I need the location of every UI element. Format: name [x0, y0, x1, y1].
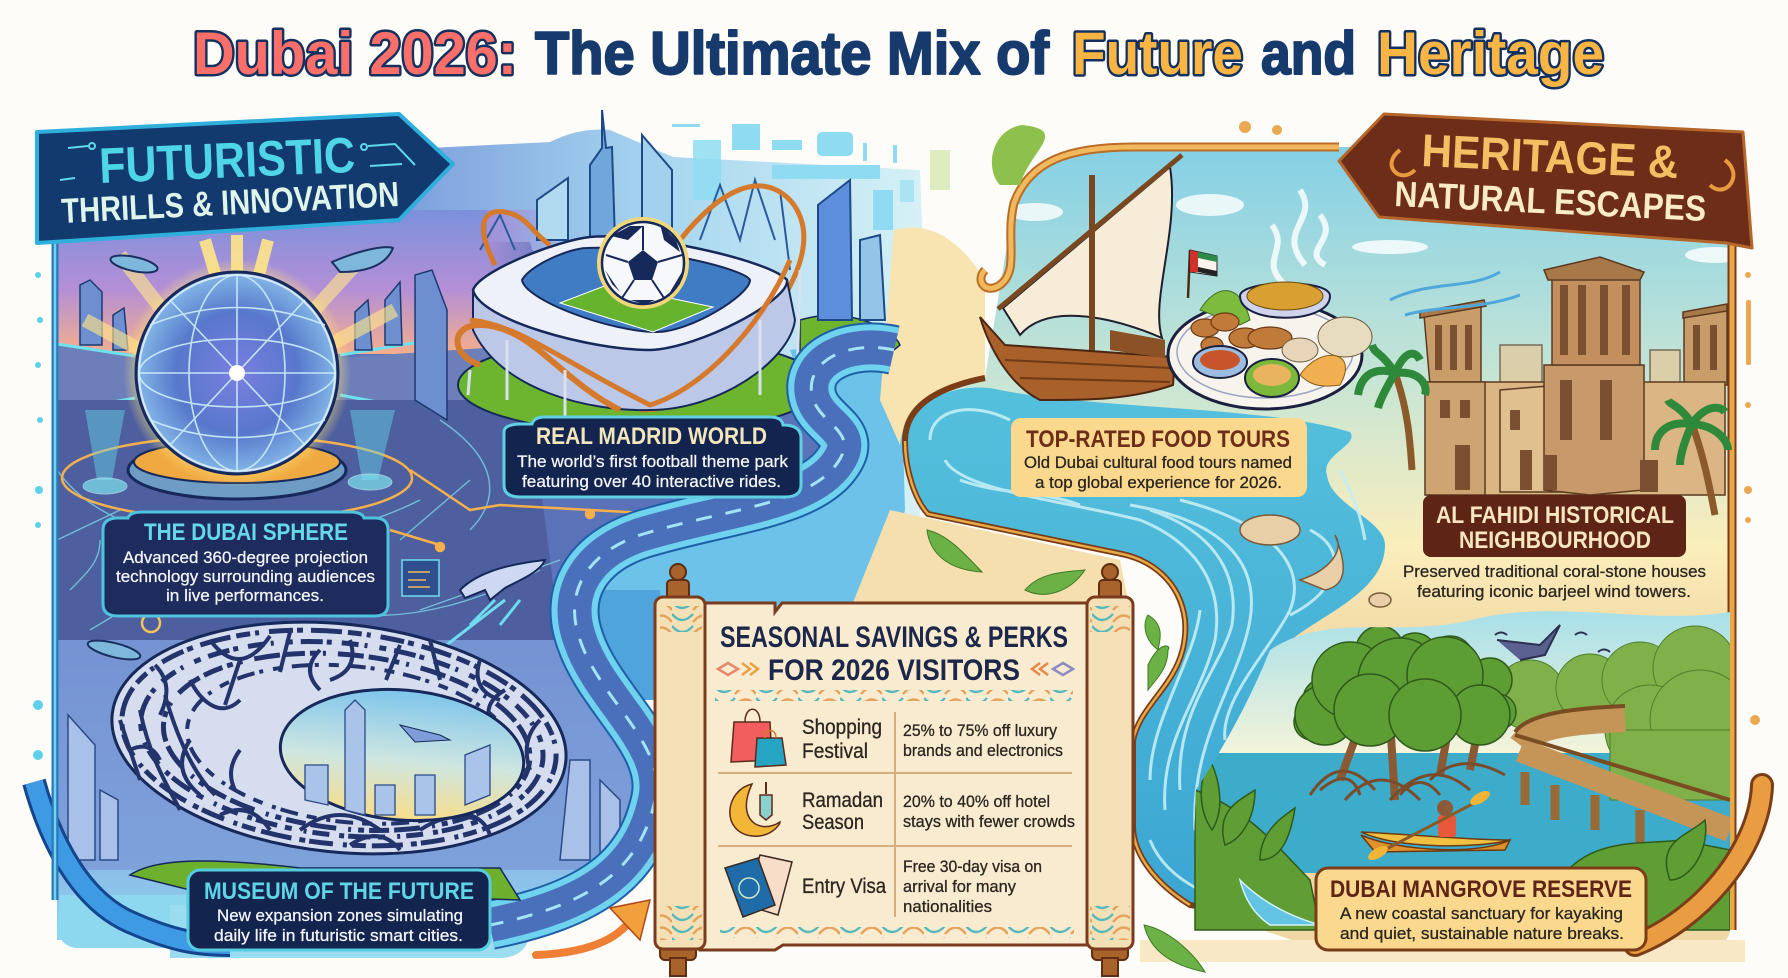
row: shopping festival: [802, 716, 1063, 763]
row: shopping festival: Shopping: [802, 716, 882, 739]
row: ramadan season: [802, 789, 1075, 834]
heading: heritage and natural escapes: [1339, 114, 1752, 248]
text box: al fahidi: Preserved traditional coral-stone houses: [1403, 562, 1706, 581]
icon: dhow boat: [980, 155, 1182, 400]
text box: the dubai sphere: [103, 512, 388, 616]
right tower: [1684, 308, 1727, 385]
panel: heritage backdrop: [850, 147, 1745, 962]
text box: top-rated food tours: TOP-RATED FOOD TOURS: [1026, 426, 1290, 453]
coaster back: [640, 186, 804, 410]
text box: museum of the future: MUSEUM OF THE FUTURE: [204, 878, 474, 905]
wind swirl: [1390, 272, 1520, 315]
title: [193, 20, 1604, 87]
row: entry visa: nationalities: [903, 897, 992, 916]
text box: the dubai sphere: technology surrounding audiences: [116, 567, 375, 586]
icon: airplane: [440, 560, 545, 650]
table rules: [718, 712, 1072, 917]
icon: uae flag: [1188, 250, 1217, 298]
text box: museum of the future: [130, 861, 520, 950]
text box: top-rated food tours: Old Dubai cultural food tours named: [1024, 453, 1292, 472]
title: Future: [1072, 20, 1243, 87]
icon: hologram pillars: [83, 410, 395, 494]
scroll paper: [700, 603, 1090, 950]
title: The Ultimate Mix of: [535, 20, 1050, 87]
row: entry visa: arrival for many: [903, 877, 1016, 896]
circuits: [142, 470, 680, 632]
panel border and gold swirl: [981, 125, 1732, 930]
cyan dots: [33, 272, 43, 760]
text box: the dubai sphere: in live performances.: [166, 586, 324, 605]
icon: museum of the future: [100, 601, 578, 875]
coaster supports: [480, 180, 790, 270]
text box: al fahidi: [1403, 495, 1706, 601]
icon: skyline behind sphere: [80, 270, 447, 420]
icon: leaves around scroll: [927, 530, 1205, 972]
title: Dubai 2026:: [193, 20, 517, 87]
heading: heritage and natural escapes: HERITAGE &: [1421, 124, 1680, 188]
row: ramadan season: stays with fewer crowds: [903, 812, 1075, 831]
digital pixel pattern: [672, 124, 950, 306]
row: shopping festival: 25% to 75% off luxury: [903, 721, 1057, 740]
icon: dubai sphere: [62, 259, 412, 520]
row: entry visa: Free 30-day visa on: [903, 857, 1042, 876]
heading: futuristic thrills: THRILLS & INNOVATION: [60, 175, 400, 231]
scroll heading: SEASONAL SAVINGS & PERKS: [720, 621, 1068, 654]
text box: al fahidi: AL FAHIDI HISTORICAL: [1436, 502, 1674, 529]
text box: museum of the future: daily life in futuristic smart cities.: [214, 926, 463, 945]
title: and: [1261, 20, 1356, 87]
text box: the dubai sphere: THE DUBAI SPHERE: [144, 519, 348, 546]
text box: real madrid world: [504, 417, 801, 497]
icon: mangrove trees: [1294, 626, 1516, 800]
icon: info card: [402, 560, 439, 596]
river: [905, 378, 1385, 925]
icon: foreground foliage: [1195, 760, 1730, 930]
steam: [1272, 190, 1326, 285]
river foreground waterfall: [1240, 880, 1320, 925]
row: ramadan season: Season: [802, 811, 864, 834]
text box: real madrid world: REAL MADRID WORLD: [536, 423, 767, 450]
text box: al fahidi: featuring iconic barjeel wind towers.: [1417, 582, 1691, 601]
icon: real madrid stadium: [458, 110, 900, 433]
icon: palm trees: [1358, 345, 1728, 515]
icon: shopping bags: [731, 709, 786, 767]
text box: top-rated food tours: a top global experience for 2026.: [1035, 473, 1282, 492]
icon: food plate: [1168, 282, 1372, 409]
icon: birds: [1495, 625, 1610, 660]
text box: real madrid world: The world’s first football theme park: [517, 452, 788, 471]
icon: kayak: [1361, 788, 1510, 863]
row: entry visa: Entry Visa: [802, 875, 886, 898]
stadium base: [473, 280, 795, 410]
coaster front: [458, 325, 620, 410]
city towers: [537, 110, 885, 320]
arrow to scroll: [536, 900, 650, 955]
icon: boardwalk: [1515, 706, 1730, 845]
row: shopping festival: brands and electronics: [903, 741, 1063, 760]
scroll rolls: [655, 597, 705, 949]
panel: futuristic backdrop: [57, 124, 950, 958]
row: ramadan season: Ramadan: [802, 789, 883, 812]
icon: al fahidi towers: [1420, 257, 1727, 495]
text box: dubai mangrove reserve: and quiet, sustainable nature breaks.: [1340, 924, 1624, 943]
row: entry visa: [802, 857, 1042, 916]
heading: futuristic thrills: FUTURISTIC: [98, 127, 356, 194]
distant towers: [1500, 345, 1542, 405]
title: Heritage: [1377, 20, 1604, 87]
accent dots: [1239, 121, 1760, 725]
icon: orange boomerang accent: [1635, 785, 1762, 945]
heading: futuristic thrills: [37, 114, 453, 243]
icon: passport and visa: [725, 855, 792, 917]
icon: museum skyline: [68, 715, 620, 860]
road: [34, 347, 894, 945]
background trees: [1506, 626, 1730, 800]
scroll knobs: [660, 564, 1128, 976]
text box: dubai mangrove reserve: A new coastal sanctuary for kayaking: [1340, 904, 1623, 923]
rocks: [1240, 515, 1391, 607]
panel: mangrove scene: [1190, 600, 1750, 930]
icon: crescent and lantern: [730, 782, 780, 836]
roof: [473, 236, 787, 350]
heading: heritage and natural escapes: NATURAL ESCAPES: [1394, 173, 1707, 229]
left tower: [1424, 305, 1481, 385]
text box: dubai mangrove reserve: [1316, 868, 1646, 950]
text box: museum of the future: New expansion zones simulating: [217, 906, 463, 925]
icon: sun rays: [85, 235, 395, 355]
row: shopping festival: Festival: [802, 740, 868, 763]
icon: flying saucer and spaceship: [86, 247, 393, 663]
text box: al fahidi: NEIGHBOURHOOD: [1459, 527, 1651, 554]
row: ramadan season: 20% to 40% off hotel: [903, 792, 1050, 811]
panel: savings scroll: [655, 564, 1133, 976]
text box: top-rated food tours: [1011, 418, 1307, 497]
text box: the dubai sphere: Advanced 360-degree projection: [123, 548, 368, 567]
text box: dubai mangrove reserve: DUBAI MANGROVE RESERVE: [1330, 876, 1632, 903]
main tower: [1552, 270, 1640, 365]
text box: real madrid world: featuring over 40 interactive rides.: [522, 472, 781, 491]
football: [599, 219, 687, 307]
main wall: [1427, 382, 1725, 495]
left panel border: [52, 240, 58, 900]
panel: savings scroll: FOR 2026 VISITORS: [768, 654, 1020, 687]
clouds: [1007, 194, 1745, 263]
